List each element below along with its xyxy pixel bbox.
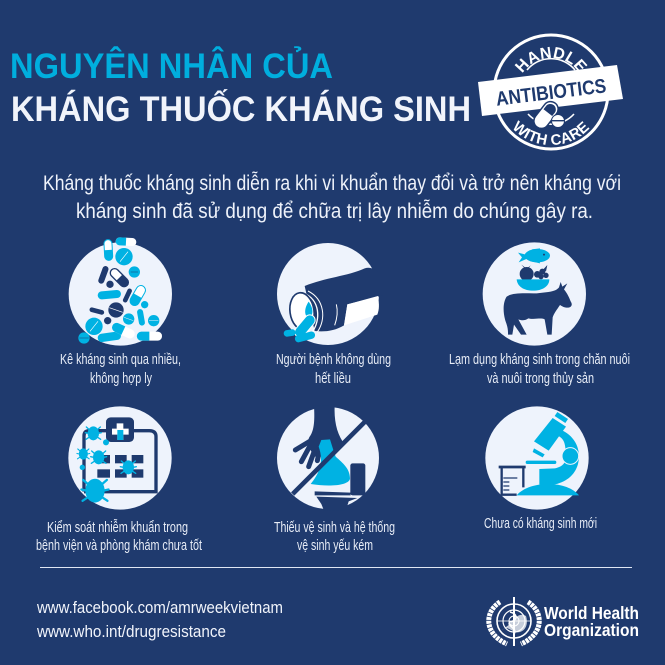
badge: handle antibiotics with care: [478, 34, 623, 150]
icon: microscope and beaker: [485, 406, 589, 510]
footer links: www.who.int/drugresistance: [36, 622, 226, 641]
logo: World Health Organization: Organization: [544, 620, 639, 640]
title: KHÁNG THUỐC KHÁNG SINH: [11, 89, 471, 129]
caption: [276, 352, 391, 387]
icon: spilled pill bottle: [277, 243, 383, 345]
logo: WHO emblem: [489, 597, 539, 646]
intro text: [43, 172, 621, 223]
intro text: kháng sinh đã sử dụng để chữa trị lây nhiễm do chúng gây ra.: [76, 200, 593, 223]
caption: [274, 520, 395, 554]
caption: [60, 352, 181, 387]
caption: bệnh viện và phòng khám chưa tốt: [36, 538, 202, 554]
icon: crossed-out hand, bag and toilet: [277, 405, 379, 511]
caption: [36, 519, 202, 554]
badge: handle antibiotics with care: HANDLE: [514, 46, 588, 73]
footer links: www.facebook.com/amrweekvietnam: [36, 598, 283, 617]
logo: World Health Organization: World Health: [544, 603, 639, 623]
panel: overprescribing: [60, 237, 181, 387]
panel: agriculture: [449, 242, 630, 387]
panel: poor hygiene: [274, 405, 395, 554]
caption: Chưa có kháng sinh mới: [484, 516, 597, 532]
caption: Kiểm soát nhiễm khuẩn trong: [47, 519, 188, 536]
caption: Người bệnh không dùng: [276, 352, 391, 368]
badge: handle antibiotics with care: WITH CARE: [514, 120, 590, 145]
panel: infection control: [36, 406, 202, 554]
caption: Thiếu vệ sinh và hệ thống: [274, 520, 395, 536]
divider: [40, 567, 632, 568]
badge: handle antibiotics with care: ANTIBIOTICS: [495, 75, 608, 111]
title: NGUYÊN NHÂN CỦA: [10, 46, 333, 86]
icon: hospital with bugs: [68, 406, 172, 510]
logo: World Health Organization: [544, 603, 639, 640]
footer links: [36, 598, 283, 641]
panel: no new antibiotics: [484, 406, 597, 532]
icon: pills: [69, 237, 172, 346]
caption: vệ sinh yếu kém: [297, 538, 373, 554]
panel: incomplete course: [276, 243, 391, 387]
icon: cow, fruit bowl and fish: [483, 242, 586, 346]
title: [10, 46, 471, 129]
caption: và nuôi trong thủy sản: [487, 371, 594, 387]
caption: Kê kháng sinh qua nhiều,: [60, 352, 181, 368]
caption: không hợp ly: [90, 371, 153, 387]
caption: hết liều: [315, 371, 351, 387]
caption: [449, 352, 630, 387]
